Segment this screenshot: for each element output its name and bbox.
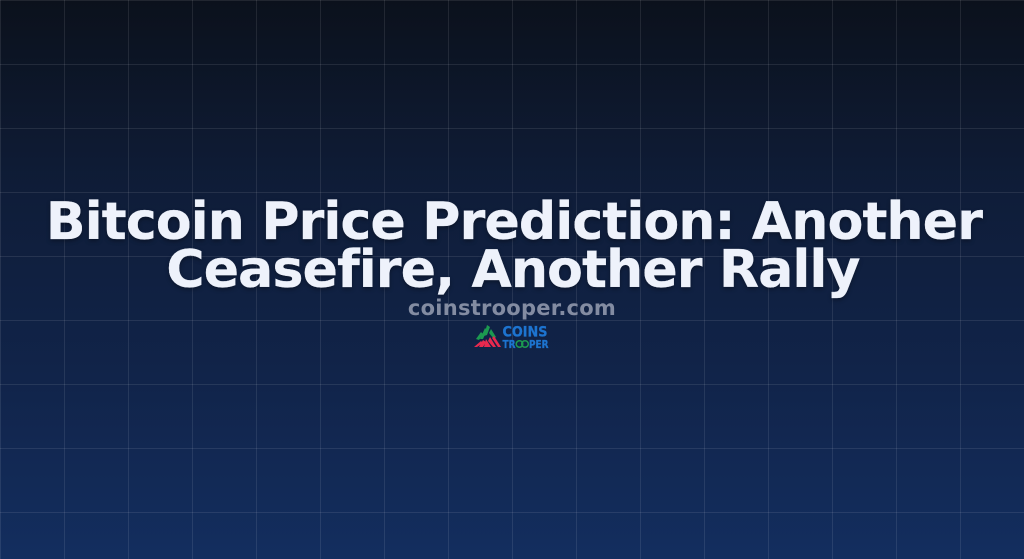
logo word: COINS: COINS [502, 324, 548, 340]
website caption: coinstrooper.com [408, 296, 616, 320]
logo mark: green bars [476, 325, 496, 340]
title: Bitcoin Price Prediction: Another [46, 192, 982, 252]
title: Ceasefire, Another Rally [166, 240, 860, 300]
icon: CoinsTrooper logo [474, 324, 548, 350]
title [46, 192, 983, 301]
logo mark: red bars [474, 336, 501, 347]
logo word: TROOPER [502, 339, 548, 351]
